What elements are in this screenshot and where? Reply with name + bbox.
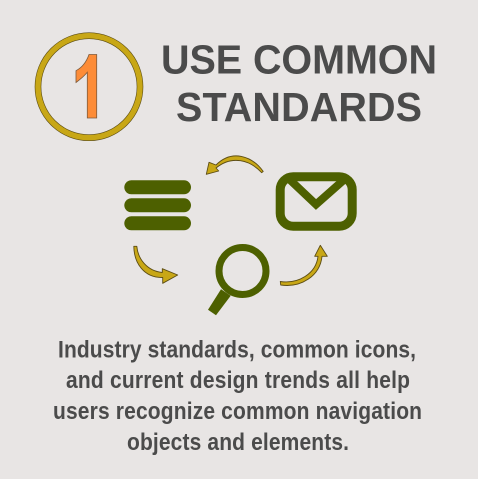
body text: and current design trends all help	[66, 367, 410, 393]
icon: envelope	[280, 177, 352, 226]
title: STANDARDS	[176, 86, 422, 130]
icon: number 1 badge	[38, 36, 140, 138]
icon: magnifying glass	[208, 248, 266, 315]
body text: objects and elements.	[127, 429, 349, 455]
title	[161, 38, 437, 130]
title: USE COMMON	[161, 38, 437, 83]
body text: Industry standards, common icons,	[58, 336, 416, 363]
arrow: mail to menu	[206, 156, 263, 174]
arrow: search to mail	[280, 245, 327, 285]
body text: users recognize common navigation	[53, 398, 422, 424]
icon: menu bars	[124, 180, 191, 230]
body text	[53, 336, 422, 455]
arrow: menu to search	[134, 246, 178, 283]
